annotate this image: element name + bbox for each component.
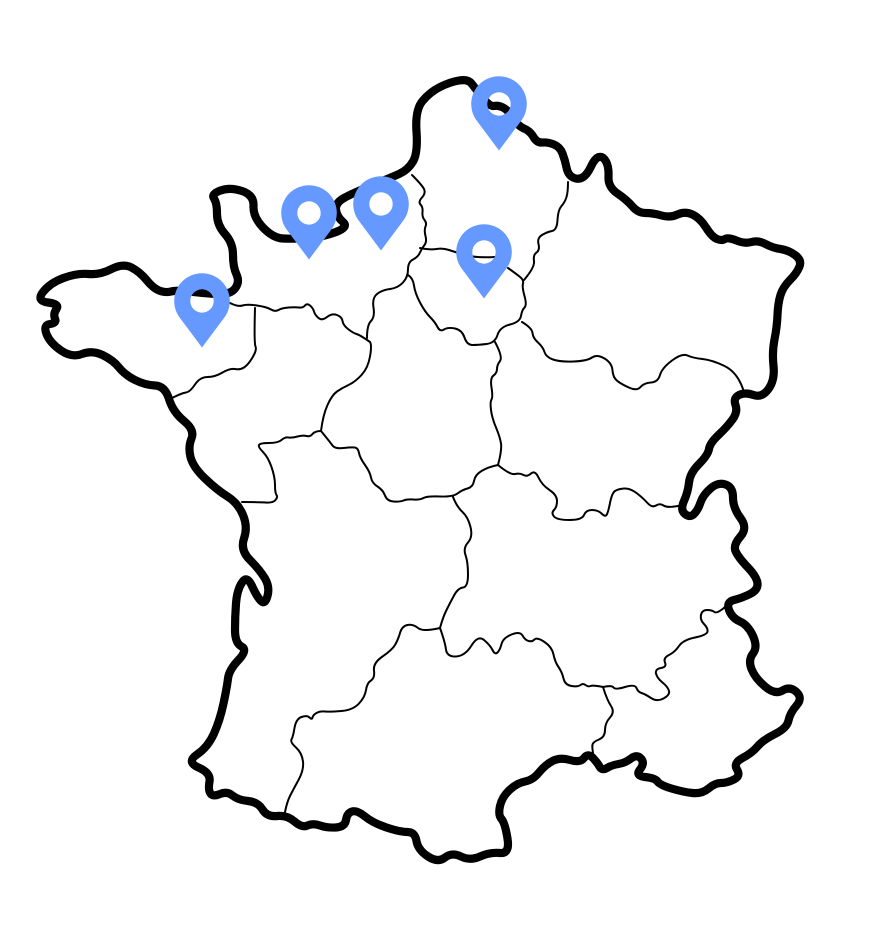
outline of France <box>40 80 800 860</box>
pin: Hauts-de-France <box>471 76 527 150</box>
pin: Ile-de-France <box>456 224 512 298</box>
pin: Brittany <box>174 273 230 348</box>
region boundaries <box>172 175 743 812</box>
pin: Normandy west <box>281 185 337 260</box>
pin: Normandy east <box>353 176 409 250</box>
